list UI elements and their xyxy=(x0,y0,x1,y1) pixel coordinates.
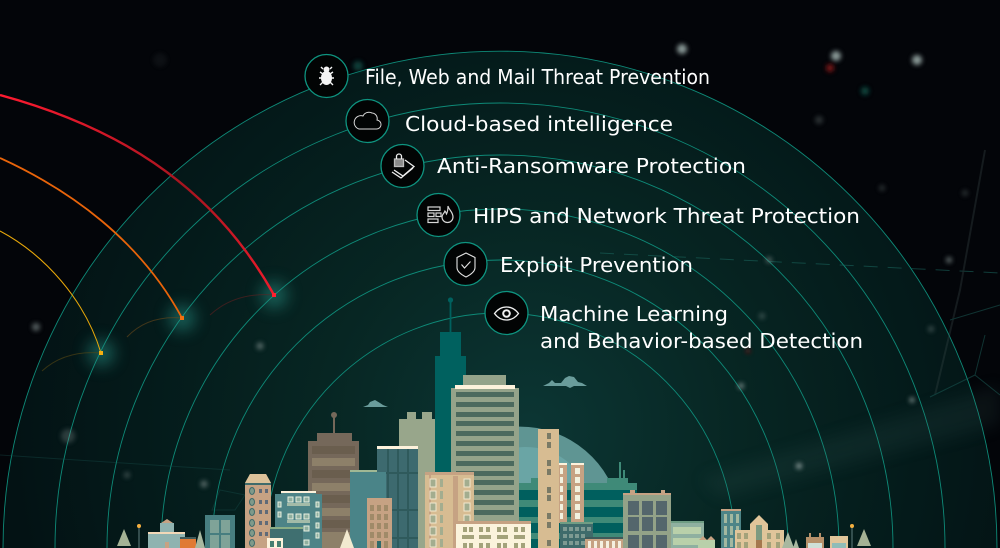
layer 6: machine learning and behavior-based detection: and Behavior-based Detection xyxy=(540,329,863,353)
layer 2: cloud-based intelligence xyxy=(346,100,673,142)
background network lines xyxy=(0,150,1000,510)
layer 1: file, web and mail threat prevention: File, Web and Mail Threat Prevention xyxy=(365,65,710,89)
castle building xyxy=(399,412,435,548)
low teal block with white annex xyxy=(267,527,303,548)
icon: locked file xyxy=(392,154,414,178)
glass building xyxy=(377,446,418,548)
grey office xyxy=(623,490,671,548)
cityscape xyxy=(117,297,871,548)
cream block xyxy=(456,521,531,548)
layer 6: machine learning and behavior-based detection: Machine Learning xyxy=(540,302,728,326)
right teal building xyxy=(721,509,741,548)
salmon towers xyxy=(559,463,584,523)
teal block xyxy=(350,470,386,548)
left mansion xyxy=(148,519,196,548)
trees and lamps xyxy=(117,524,871,548)
blurred background lights xyxy=(32,44,968,488)
layer 3: anti-ransomware protection: Anti-Ransomware Protection xyxy=(437,154,746,178)
threat arc glows xyxy=(88,282,287,366)
red and green lights xyxy=(746,64,869,353)
threat arc: yellow xyxy=(0,231,103,371)
icon: cloud xyxy=(354,112,381,129)
layer 5: exploit prevention: Exploit Prevention xyxy=(500,253,693,277)
teal tower xyxy=(435,297,466,476)
icon: firewall flame xyxy=(428,206,453,223)
diagonal light streak xyxy=(700,385,1000,498)
layer 4: HIPS and network threat protection xyxy=(417,194,860,236)
icon: bug xyxy=(319,66,334,85)
layer 3: anti-ransomware protection xyxy=(381,144,746,188)
icon: shield check xyxy=(457,253,475,277)
left teal building xyxy=(205,515,235,548)
layer 4: HIPS and network threat protection: HIPS and Network Threat Protection xyxy=(473,204,860,228)
right houses xyxy=(806,533,848,548)
cloud: large xyxy=(543,376,587,388)
cloud: small xyxy=(363,400,388,407)
small gabled house xyxy=(698,536,715,548)
layer 2: cloud-based intelligence: Cloud-based intelligence xyxy=(405,112,673,136)
pale green building xyxy=(671,521,704,548)
icon: eye xyxy=(494,307,518,320)
brown tower xyxy=(308,412,359,548)
main office tower xyxy=(451,375,519,548)
layer 6: machine learning and behavior-based detection xyxy=(485,292,863,353)
tan manor xyxy=(735,515,784,548)
teal hotel xyxy=(275,491,322,548)
tan apartment xyxy=(425,472,474,548)
tall tan tower xyxy=(538,429,559,548)
green building xyxy=(518,462,637,548)
tan small building xyxy=(367,498,392,548)
threat arc: orange xyxy=(0,158,184,337)
low arched building xyxy=(585,537,633,548)
oval-window tower xyxy=(245,474,271,548)
layer 1: file, web and mail threat prevention xyxy=(305,54,710,98)
dome xyxy=(431,427,621,548)
dark teal small building xyxy=(560,522,593,548)
threat arc: red xyxy=(0,95,276,315)
layer 5: exploit prevention xyxy=(444,242,693,286)
